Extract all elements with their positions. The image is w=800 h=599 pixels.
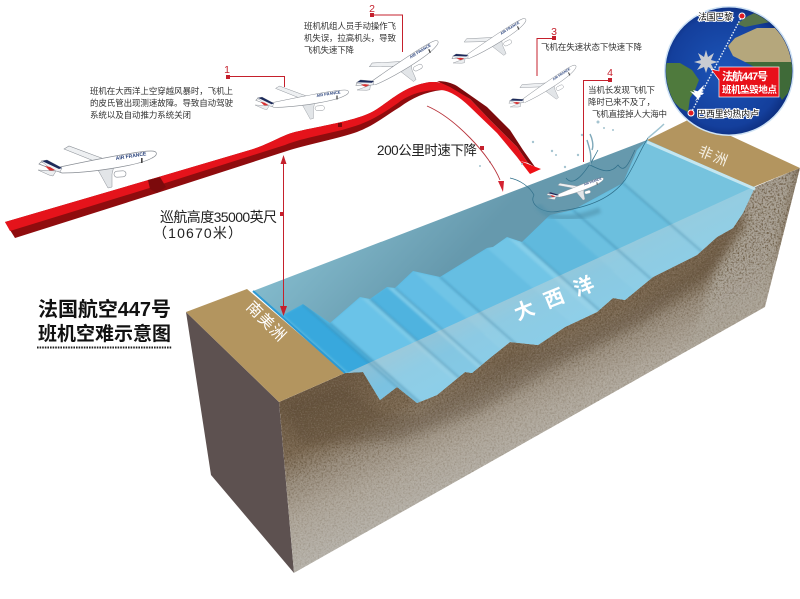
kink shadow (148, 177, 166, 193)
descent dark side (437, 81, 535, 167)
callout 1: 1 (224, 64, 230, 76)
africa top (647, 118, 800, 187)
callout 3: 3 (551, 26, 557, 38)
label: atlantic ocean: 大西洋 (511, 268, 609, 325)
paris marker (739, 13, 745, 19)
title: 法国航空447号 (38, 298, 171, 321)
callout 3 (537, 26, 642, 76)
callout 4 (584, 67, 667, 162)
plane 5: AIR FRANCE (552, 67, 572, 81)
descent speed label and arrow (377, 106, 504, 192)
callout 4: 降时已来不及了， (588, 97, 655, 107)
plane 3 (350, 36, 449, 103)
sea front glass (347, 187, 760, 420)
sea back wall (253, 140, 700, 370)
crash callout (711, 67, 779, 97)
block left face (186, 312, 294, 573)
callout 1: 系统以及自动推力系统关闭 (90, 110, 191, 120)
crash burst (694, 50, 718, 73)
callout 1: 的皮氏管出现测速故障。导致自动驾驶 (90, 98, 233, 108)
label: africa: 非洲 (696, 143, 732, 169)
globe map (664, 6, 795, 136)
callout 2: 2 (369, 3, 375, 15)
callout 4: 4 (607, 67, 613, 79)
rio label: 巴西里约热内卢 (697, 108, 759, 119)
callout 2: 机失误，拉高机头，导致 (304, 33, 396, 43)
arrow head (520, 161, 541, 174)
plane 4 (446, 14, 535, 75)
callout 3: 飞机在失速状态下快速下降 (541, 42, 642, 52)
plane 1 (38, 146, 156, 188)
cruise altitude label and arrow: 巡航高度35000英尺 (160, 209, 277, 225)
callout 2: 飞机失速下降 (304, 45, 354, 55)
label: south america: 南美洲 (242, 298, 290, 346)
callout 4: 飞机直接掉人大海中 (592, 109, 667, 119)
callout 4: 当机长发现飞机下 (588, 85, 655, 95)
plane 2: AIR FRANCE (316, 89, 341, 98)
water splash (479, 120, 664, 218)
ascent dark side (5, 82, 450, 238)
ascent and descent bright side (5, 82, 528, 231)
flight route (691, 16, 742, 113)
cruise altitude label and arrow (153, 155, 287, 316)
callout 1: 班机在大西洋上空穿越风暴时，飞机上 (90, 86, 233, 96)
rio marker (688, 110, 694, 116)
crashed plane (545, 175, 607, 207)
block front soil face (270, 160, 800, 580)
plane 4: AIR FRANCE (500, 20, 521, 36)
crash callout: 班机坠毁地点 (722, 84, 777, 96)
continents (665, 6, 795, 112)
paris label: 法国巴黎 (698, 11, 733, 22)
crashed plane: AIR FRANCE (583, 177, 602, 187)
callout 2: 班机机组人员手动操作飞 (304, 21, 396, 31)
callout 2 (304, 3, 402, 55)
callout 1 (90, 64, 284, 120)
plane 2 (255, 86, 349, 119)
descent speed label and arrow: 200公里时速下降 (377, 143, 478, 158)
cruise altitude label and arrow: （10670米） (153, 225, 242, 241)
land block with ocean trench (186, 118, 800, 580)
title: 班机空难示意图 (38, 322, 171, 345)
crash callout: 法航447号 (722, 69, 768, 83)
plane 1: AIR FRANCE (115, 151, 147, 162)
title (37, 298, 172, 348)
sea floor ridges (268, 140, 755, 403)
flight path ribbon (5, 81, 541, 238)
route plane icon (690, 85, 704, 101)
plane 5 (504, 61, 585, 118)
plane 3: AIR FRANCE (409, 42, 432, 59)
south america top (186, 289, 345, 402)
